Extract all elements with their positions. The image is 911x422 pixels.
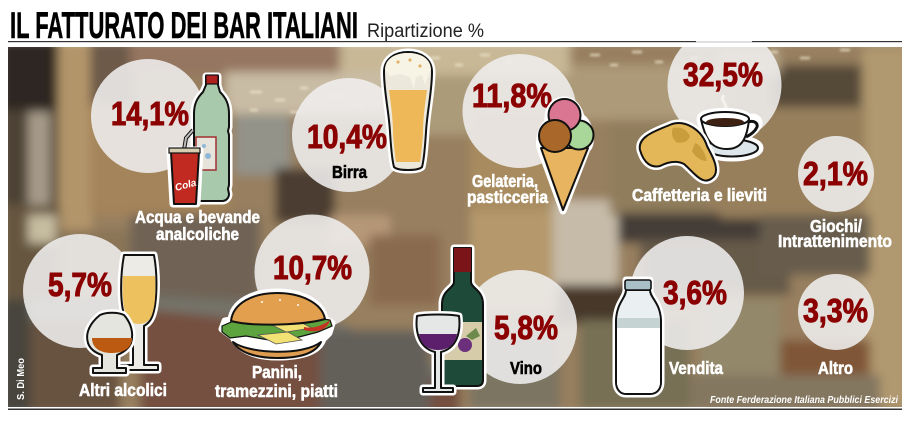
title: IL FATTURATO DEI BAR ITALIANI <box>10 5 358 46</box>
panel: vino <box>417 248 577 392</box>
panel: caffetteria e lieviti <box>632 47 782 205</box>
label line 2: analcoliche <box>156 224 239 244</box>
circle <box>668 47 782 142</box>
value: 3,3% <box>803 292 868 329</box>
circle <box>463 270 577 384</box>
panel: vendita <box>616 236 744 394</box>
icon: beer glass <box>384 52 432 170</box>
icon: bottle and cola cup <box>169 75 229 204</box>
icon: steam <box>723 95 726 111</box>
credit: S. Di Meo <box>15 358 27 400</box>
value: 2,1% <box>803 155 868 192</box>
panel: gelateria, pasticceria <box>462 54 594 211</box>
icon: wine glass <box>417 314 459 392</box>
circle <box>23 234 137 348</box>
label: Panini, <box>252 362 302 382</box>
label: Altri alcolici <box>79 380 167 400</box>
value: 5,8% <box>494 309 558 346</box>
value: 5,7% <box>48 266 112 303</box>
label line 2: pasticceria <box>467 187 548 207</box>
circle <box>91 59 205 173</box>
circle <box>798 274 874 350</box>
label: Vendita <box>669 358 723 378</box>
panel: giochi/intrattenimento <box>778 136 892 251</box>
circle <box>462 54 576 168</box>
value: 14,1% <box>111 95 189 132</box>
label line 2: tramezzini, piatti <box>215 381 338 401</box>
icon: wine bottle <box>442 248 483 386</box>
value: 32,5% <box>683 56 763 93</box>
panel: birra <box>292 52 432 192</box>
panel: altro <box>798 274 874 378</box>
icon: bottle and cola cup: Cola <box>174 178 198 194</box>
label: Altro <box>818 358 853 378</box>
sparkling glasses on the shelf <box>250 50 850 112</box>
label: Giochi/ <box>810 216 862 236</box>
circle <box>292 78 406 192</box>
icon: croissant <box>640 123 716 181</box>
label: Caffetteria e lieviti <box>632 185 767 205</box>
icon: ice cream cone <box>539 99 594 211</box>
circle <box>798 136 874 212</box>
panel: altri alcolici <box>23 234 167 400</box>
panel: panini, tramezzini, piatti <box>215 214 370 401</box>
subtitle: Ripartizione % <box>367 21 484 42</box>
circle <box>630 236 744 350</box>
value: 11,8% <box>472 77 552 114</box>
value: 10,7% <box>273 249 352 286</box>
icon: cognac glass <box>87 313 132 373</box>
label line 2: Intrattenimento <box>778 231 892 251</box>
value: 3,6% <box>663 274 727 311</box>
icon: sandwich <box>222 292 332 358</box>
value: 10,4% <box>307 118 387 155</box>
icon: champagne flute <box>119 255 158 370</box>
label: Acqua e bevande <box>135 207 260 227</box>
label: Gelateria, <box>472 171 538 191</box>
circle <box>254 214 370 330</box>
icon: coffee cup <box>700 111 760 158</box>
label: Vino <box>510 358 542 378</box>
icon: milk bottle <box>616 280 661 394</box>
panel: acqua e bevande analcoliche <box>91 59 260 244</box>
label: Birra <box>332 162 367 182</box>
